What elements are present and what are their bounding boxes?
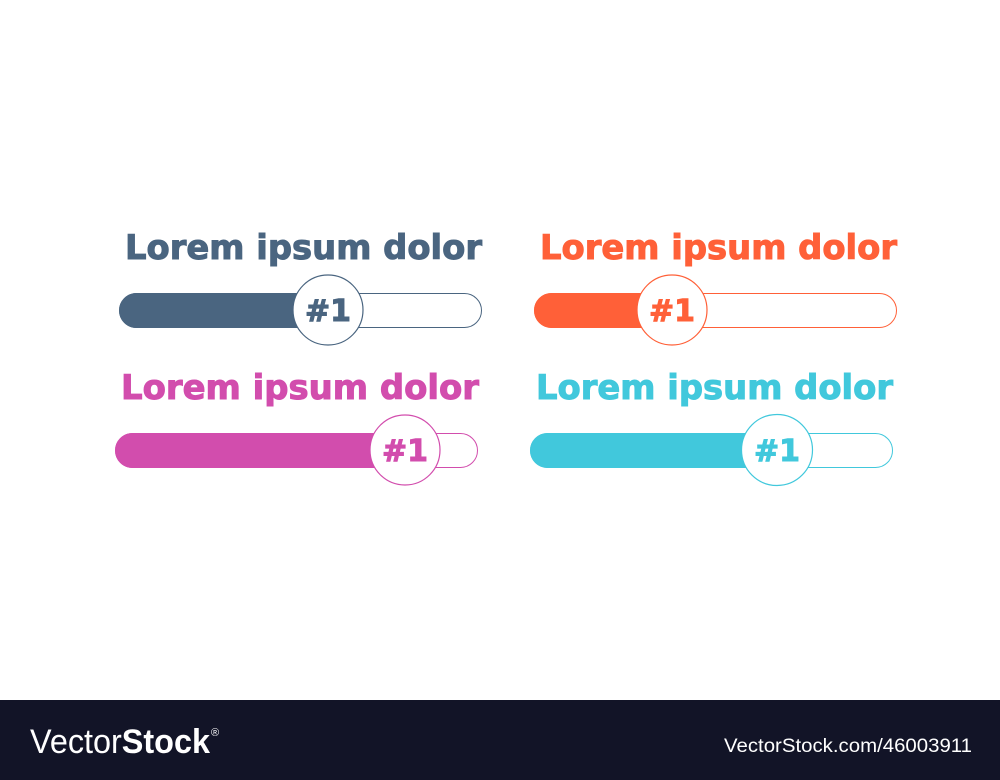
footer bar bbox=[0, 700, 1000, 780]
footer registered mark: ® bbox=[211, 727, 219, 739]
heading: slate: Lorem ipsum dolor bbox=[125, 228, 482, 268]
footer logo: VectorStock bbox=[30, 723, 210, 761]
footer url: VectorStock.com/46003911 bbox=[724, 736, 972, 757]
progress bar: cyan: #1 bbox=[754, 434, 800, 469]
panel: cyan item bbox=[530, 368, 893, 486]
panel: magenta item bbox=[115, 368, 479, 485]
heading: orange: Lorem ipsum dolor bbox=[540, 228, 897, 268]
progress bar: magenta: #1 bbox=[382, 434, 428, 469]
progress bar: slate bbox=[119, 275, 482, 345]
progress bar: orange bbox=[534, 275, 896, 345]
panel: orange item bbox=[534, 228, 897, 345]
panel: slate item bbox=[119, 228, 482, 345]
progress bar: orange: #1 bbox=[649, 294, 695, 329]
heading: cyan: Lorem ipsum dolor bbox=[536, 368, 893, 408]
progress bar: slate: #1 bbox=[305, 294, 351, 329]
heading: magenta: Lorem ipsum dolor bbox=[121, 368, 479, 408]
progress bar: magenta bbox=[115, 415, 478, 485]
progress bar: cyan bbox=[530, 414, 892, 486]
